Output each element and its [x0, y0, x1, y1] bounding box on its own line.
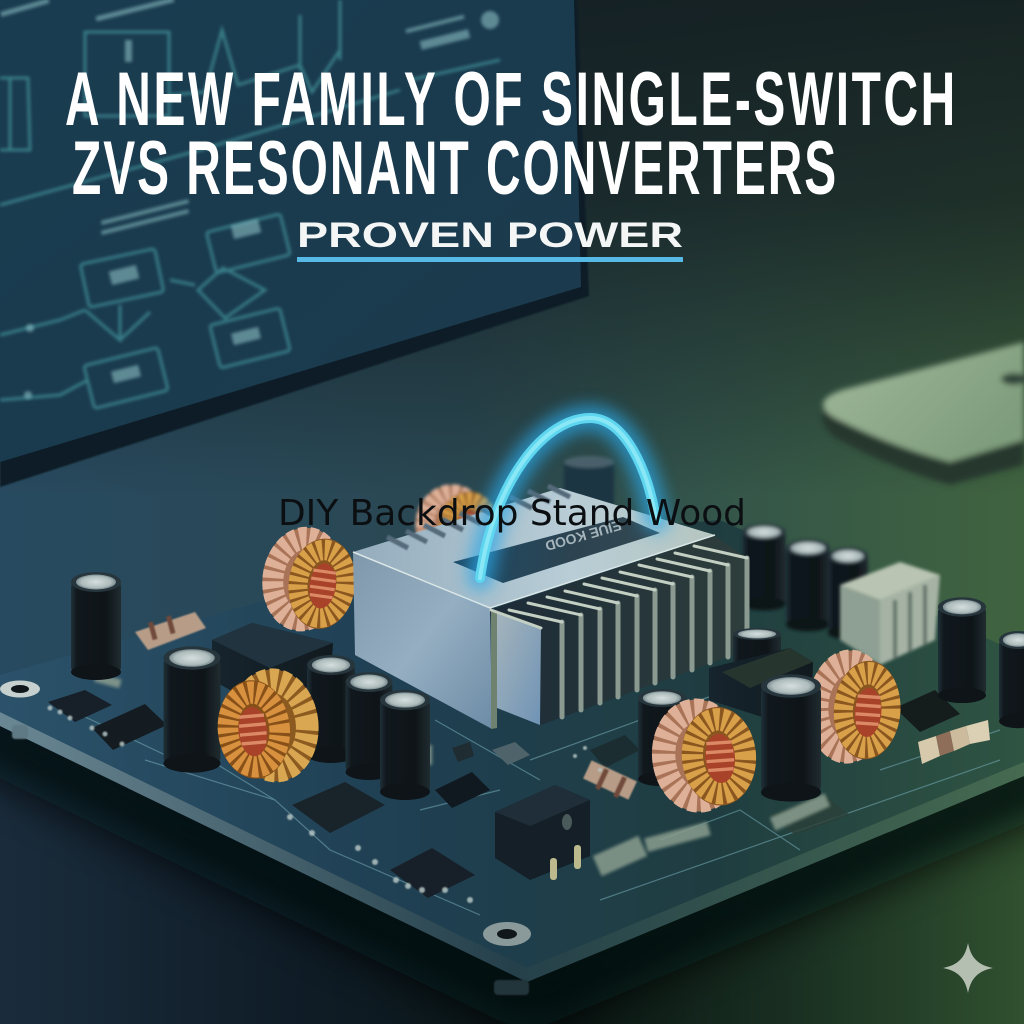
component: front capacitors near heat sink — [213, 655, 430, 800]
finned face — [490, 536, 747, 725]
title: A NEW FAMILY OF SINGLE-SWITCH — [65, 58, 955, 142]
rear top ridges — [387, 486, 570, 548]
mounting feet — [494, 980, 529, 995]
overlay caption: DIY Backdrop Stand Wood — [278, 493, 746, 534]
component: main heat sink: EIUE KOOD — [543, 517, 623, 554]
first wide fin — [491, 608, 497, 729]
component: left capacitor and coil group — [71, 522, 362, 773]
title: ZVS RESONANT CONVERTERS — [72, 127, 836, 211]
fin ribs — [491, 546, 747, 717]
component: rear blurred capacitors and coil — [416, 456, 868, 639]
logo: Proven Power wordmark — [297, 216, 683, 262]
component: black power block — [495, 785, 590, 880]
mounting holes — [0, 680, 40, 698]
board traces — [60, 690, 1000, 915]
component: silver heat sink at right — [840, 562, 940, 665]
icon: sparkle — [943, 943, 993, 993]
logo: Proven Power wordmark: PROVEN POWER — [297, 216, 683, 255]
icon: blurred mouse on desk — [822, 342, 1024, 485]
small surface-mount chips — [48, 612, 990, 903]
panel: blurred monitor with circuit diagrams — [0, 0, 589, 487]
arrow: glowing blue current arc — [480, 418, 656, 578]
left face — [353, 552, 492, 729]
solder and small parts — [48, 706, 602, 903]
dark label plate — [453, 517, 660, 583]
panel: circuit board — [0, 520, 1024, 995]
component: main heat sink — [353, 486, 747, 729]
title — [65, 58, 955, 211]
top face — [353, 488, 715, 608]
top edge highlight — [353, 535, 715, 608]
resistor rows — [135, 612, 637, 800]
component: right capacitor and coil group — [638, 597, 1024, 815]
